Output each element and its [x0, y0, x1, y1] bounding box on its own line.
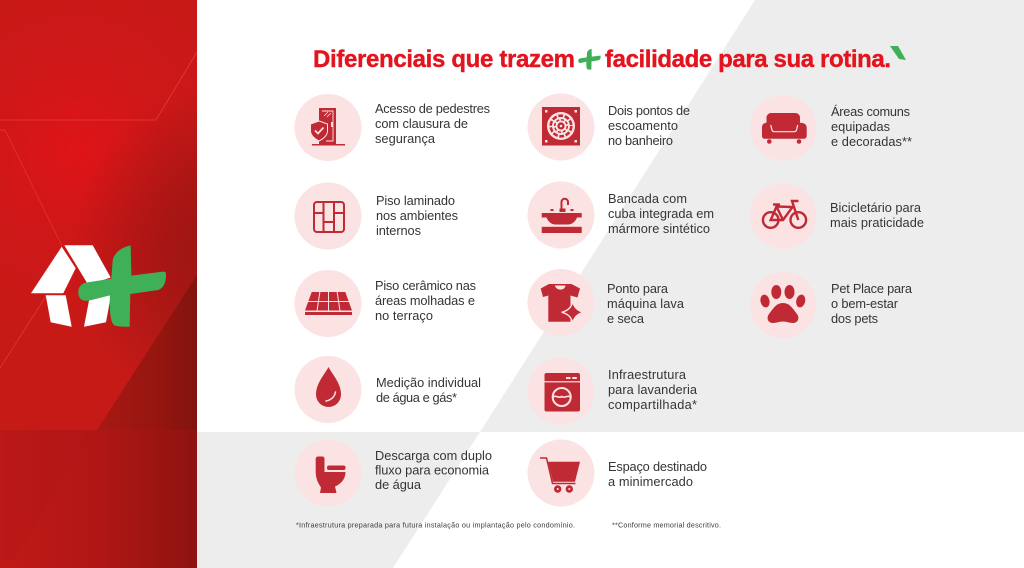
feature: mini market: [528, 440, 707, 506]
text: two drains: escoamento: [608, 118, 678, 133]
text: shared laundry: para lavanderia: [608, 382, 698, 397]
text: pedestrian access: com clausura de: [375, 116, 468, 131]
footnote: infrastructure: *Infraestrutura preparada para futura instalação ou implantação pelo condomínio.: [296, 520, 575, 530]
icon: washing machine: [544, 373, 580, 412]
icon: sink: [542, 199, 582, 233]
text: common areas: Áreas comuns: [831, 104, 910, 119]
text: common areas: equipadas: [831, 119, 890, 134]
text: individual metering: Medição individual: [376, 375, 481, 390]
text: dual flush: fluxo para economia: [375, 462, 490, 478]
text: mini market: a minimercado: [608, 474, 693, 489]
text: pet place: o bem-estar: [831, 296, 899, 311]
text: laminate floor: Piso laminado: [376, 193, 455, 208]
icon: floor drain: [542, 107, 580, 146]
text: ceramic floor: áreas molhadas e: [375, 293, 475, 308]
text: bike storage: mais praticidade: [830, 215, 924, 230]
text: bike storage: Bicicletário para: [830, 200, 922, 215]
icon: green accent mark: [890, 46, 906, 60]
feature: dual flush: [294, 440, 492, 506]
text: shared laundry: Infraestrutura: [608, 367, 687, 382]
text: common areas: e decoradas**: [831, 134, 912, 149]
feature: integrated sink: [528, 182, 714, 248]
icon: t-shirt with sparkle: [541, 284, 584, 324]
feature: washing machine point: [528, 269, 685, 336]
feature: ceramic floor: [294, 270, 476, 337]
icon: paw print: [759, 285, 806, 323]
text: washing machine point: e seca: [607, 311, 645, 326]
text: two drains: Dois pontos de: [608, 103, 690, 118]
footnote: descriptive memorial: **Conforme memorial descritivo.: [612, 520, 721, 530]
icon: door with shield: [310, 108, 345, 146]
text: ceramic floor: Piso cerâmico nas: [375, 278, 476, 293]
text: integrated sink: cuba integrada em: [608, 206, 714, 221]
icon: water drop: [316, 367, 341, 407]
icon: sofa: [762, 113, 807, 144]
text: pedestrian access: segurança: [375, 131, 436, 146]
text: mini market: Espaço destinado: [608, 459, 707, 474]
text: shared laundry: compartilhada*: [608, 397, 697, 412]
feature: bike storage: [750, 183, 924, 249]
text: integrated sink: Bancada com: [608, 191, 687, 206]
icon: laminate floor: [314, 202, 344, 232]
title: [313, 46, 906, 73]
feature: common areas: [750, 95, 912, 161]
text: integrated sink: mármore sintético: [608, 221, 710, 236]
feature: pedestrian access: [294, 94, 490, 161]
feature: laminate floor: [294, 182, 458, 250]
text: washing machine point: máquina lava: [607, 296, 685, 311]
panel: red brand sidebar: [0, 0, 197, 568]
text: two drains: no banheiro: [608, 133, 673, 148]
title: facilidade para sua rotina.: [605, 46, 891, 73]
text: dual flush: Descarga com duplo: [375, 448, 492, 463]
text: washing machine point: Ponto para: [607, 281, 669, 296]
text: pet place: Pet Place para: [831, 281, 913, 296]
feature: two drains: [528, 94, 690, 160]
icon: toilet: [316, 456, 346, 493]
feature: pet place: [750, 272, 913, 338]
title: Diferenciais que trazem: [313, 46, 575, 73]
text: pedestrian access: Acesso de pedestres: [375, 101, 490, 116]
text: laminate floor: nos ambientes: [376, 208, 458, 223]
logo: house with green plus: [31, 245, 166, 327]
icon: bicycle: [763, 201, 806, 228]
icon: shopping cart: [540, 458, 580, 493]
feature: individual metering: [294, 356, 481, 423]
icon: ceramic tiles: [305, 291, 352, 315]
text: pet place: dos pets: [831, 311, 878, 326]
text: individual metering: de água e gás*: [376, 390, 457, 405]
text: dual flush: de água: [375, 477, 422, 492]
text: laminate floor: internos: [376, 223, 421, 238]
icon: green plus in title: [578, 49, 601, 70]
text: ceramic floor: no terraço: [375, 308, 433, 323]
feature: shared laundry: [528, 358, 698, 424]
